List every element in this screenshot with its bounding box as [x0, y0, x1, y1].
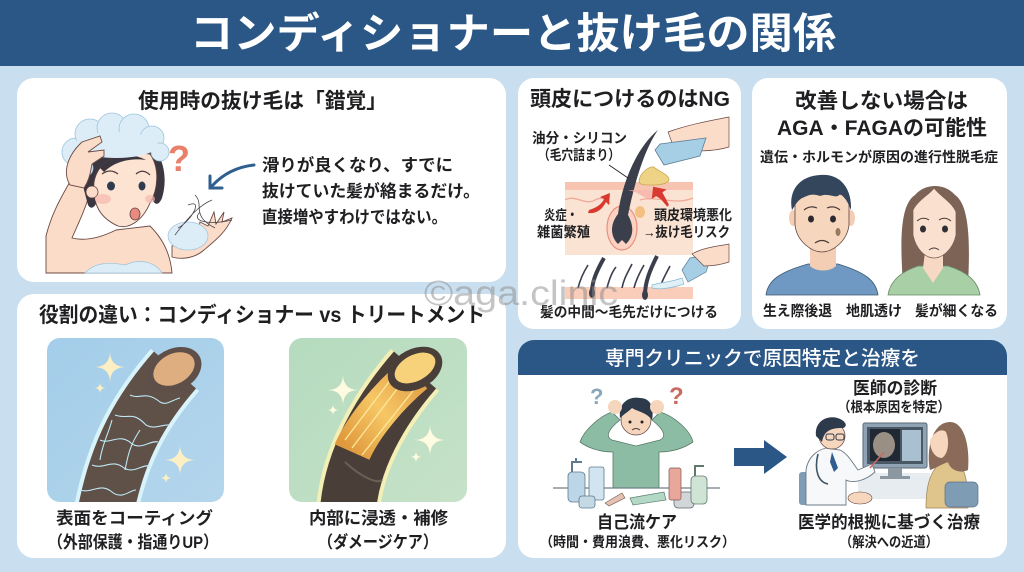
- title banner: コンディショナーと抜け毛の関係: [190, 10, 836, 57]
- caption: doctor's diagnosis: 医師の診断: [853, 379, 937, 398]
- labels: symptoms: 生え際後退: [763, 302, 832, 320]
- caption: doctor's diagnosis: （根本原因を特定）: [838, 399, 950, 415]
- icon: question mark: ?: [168, 138, 190, 179]
- caption: self-care: 自己流ケア: [597, 512, 677, 532]
- heading: difference in roles: 役割の違い：コンディショナー vs トリートメント: [39, 303, 485, 327]
- text: explanation: 直接増やすわけではない。: [262, 207, 447, 227]
- text: explanation: 滑りが良くなり、すでに: [262, 155, 453, 175]
- label: oil and silicone: 油分・シリコン: [532, 130, 627, 146]
- caption: apply mid-length to ends: 髪の中間〜毛先だけにつける: [540, 304, 718, 320]
- panel header: [518, 340, 1007, 375]
- caption: treatment penetrates: 内部に浸透・補修: [309, 509, 448, 528]
- label: scalp deterioration: →抜け毛リスク: [643, 224, 730, 240]
- caption: treatment penetrates: （ダメージケア）: [318, 532, 438, 552]
- label: scalp deterioration: [643, 207, 732, 240]
- illustration: man worrying with products: [553, 398, 720, 508]
- subheading: causes: 遺伝・ホルモンが原因の進行性脱毛症: [760, 149, 998, 165]
- illustration: worried woman: [888, 186, 980, 295]
- label: inflammation: 雑菌繁殖: [537, 224, 590, 240]
- heading: illusion: 使用時の抜け毛は「錯覚」: [138, 90, 387, 113]
- caption: doctor's diagnosis: [838, 379, 950, 415]
- panel header: 専門クリニックで原因特定と治療を: [605, 347, 920, 370]
- caption: evidence-based treatment: （解決への近道）: [840, 534, 938, 550]
- illustration: woman with foam in hair: [46, 113, 172, 273]
- label: scalp deterioration: 頭皮環境悪化: [654, 207, 732, 223]
- illustration: repaired hair interior: [289, 338, 467, 510]
- label: inflammation: 炎症・: [544, 207, 578, 223]
- illustration: worried man: [766, 175, 878, 295]
- panel: do not apply to scalp: [518, 78, 741, 329]
- panel: conditioner vs treatment roles: [17, 294, 506, 558]
- illustration: hand squeezing tube: [655, 117, 729, 165]
- illustration: coated hair shaft: [47, 338, 224, 510]
- icon: blue question mark: ?: [590, 384, 603, 409]
- title banner: [0, 0, 1024, 66]
- caption: self-care: （時間・費用浪費、悪化リスク）: [540, 534, 735, 550]
- label: inflammation: [537, 207, 590, 240]
- panel: illusion of hair loss during use: [17, 78, 506, 282]
- illustration: hand with fallen hair: [168, 195, 232, 258]
- label: oil and silicone: （毛穴詰まり）: [538, 147, 620, 163]
- illustration: doctor showing scan to patient: [799, 417, 978, 508]
- heading: AGA FAGA: [777, 90, 987, 140]
- label: oil and silicone: [532, 130, 628, 178]
- panel: specialist clinic: [518, 340, 1007, 558]
- arrow: self-care to clinic: [734, 440, 787, 474]
- caption: treatment penetrates: [309, 509, 448, 552]
- arrow: pointing to hair in hand: [210, 165, 254, 188]
- icon: red question mark: ?: [669, 383, 684, 410]
- watermark: ©aga.clinic: [424, 274, 618, 313]
- illustration: skin cross section: [565, 130, 693, 255]
- heading: AGA FAGA: AGA・FAGAの可能性: [777, 117, 987, 140]
- caption: evidence-based treatment: 医学的根拠に基づく治療: [798, 512, 980, 532]
- caption: conditioner coats surface: [48, 508, 218, 552]
- text: explanation: [262, 155, 480, 227]
- heading: AGA FAGA: 改善しない場合は: [795, 90, 968, 113]
- labels: symptoms: 地肌透け: [846, 303, 902, 320]
- text: explanation: 抜けていた髪が絡まるだけ。: [262, 181, 480, 201]
- labels: symptoms: 髪が細くなる: [915, 302, 998, 320]
- labels: symptoms: [763, 302, 998, 320]
- illustration: correct application to hair: [565, 244, 729, 300]
- caption: conditioner coats surface: 表面をコーティング: [56, 508, 213, 528]
- caption: self-care: [540, 512, 735, 550]
- caption: conditioner coats surface: （外部保護・指通りUP）: [48, 533, 218, 552]
- panel: possibility of AGA / FAGA: [752, 78, 1007, 329]
- heading: NG on scalp: 頭皮につけるのはNG: [530, 88, 730, 111]
- caption: evidence-based treatment: [798, 512, 980, 550]
